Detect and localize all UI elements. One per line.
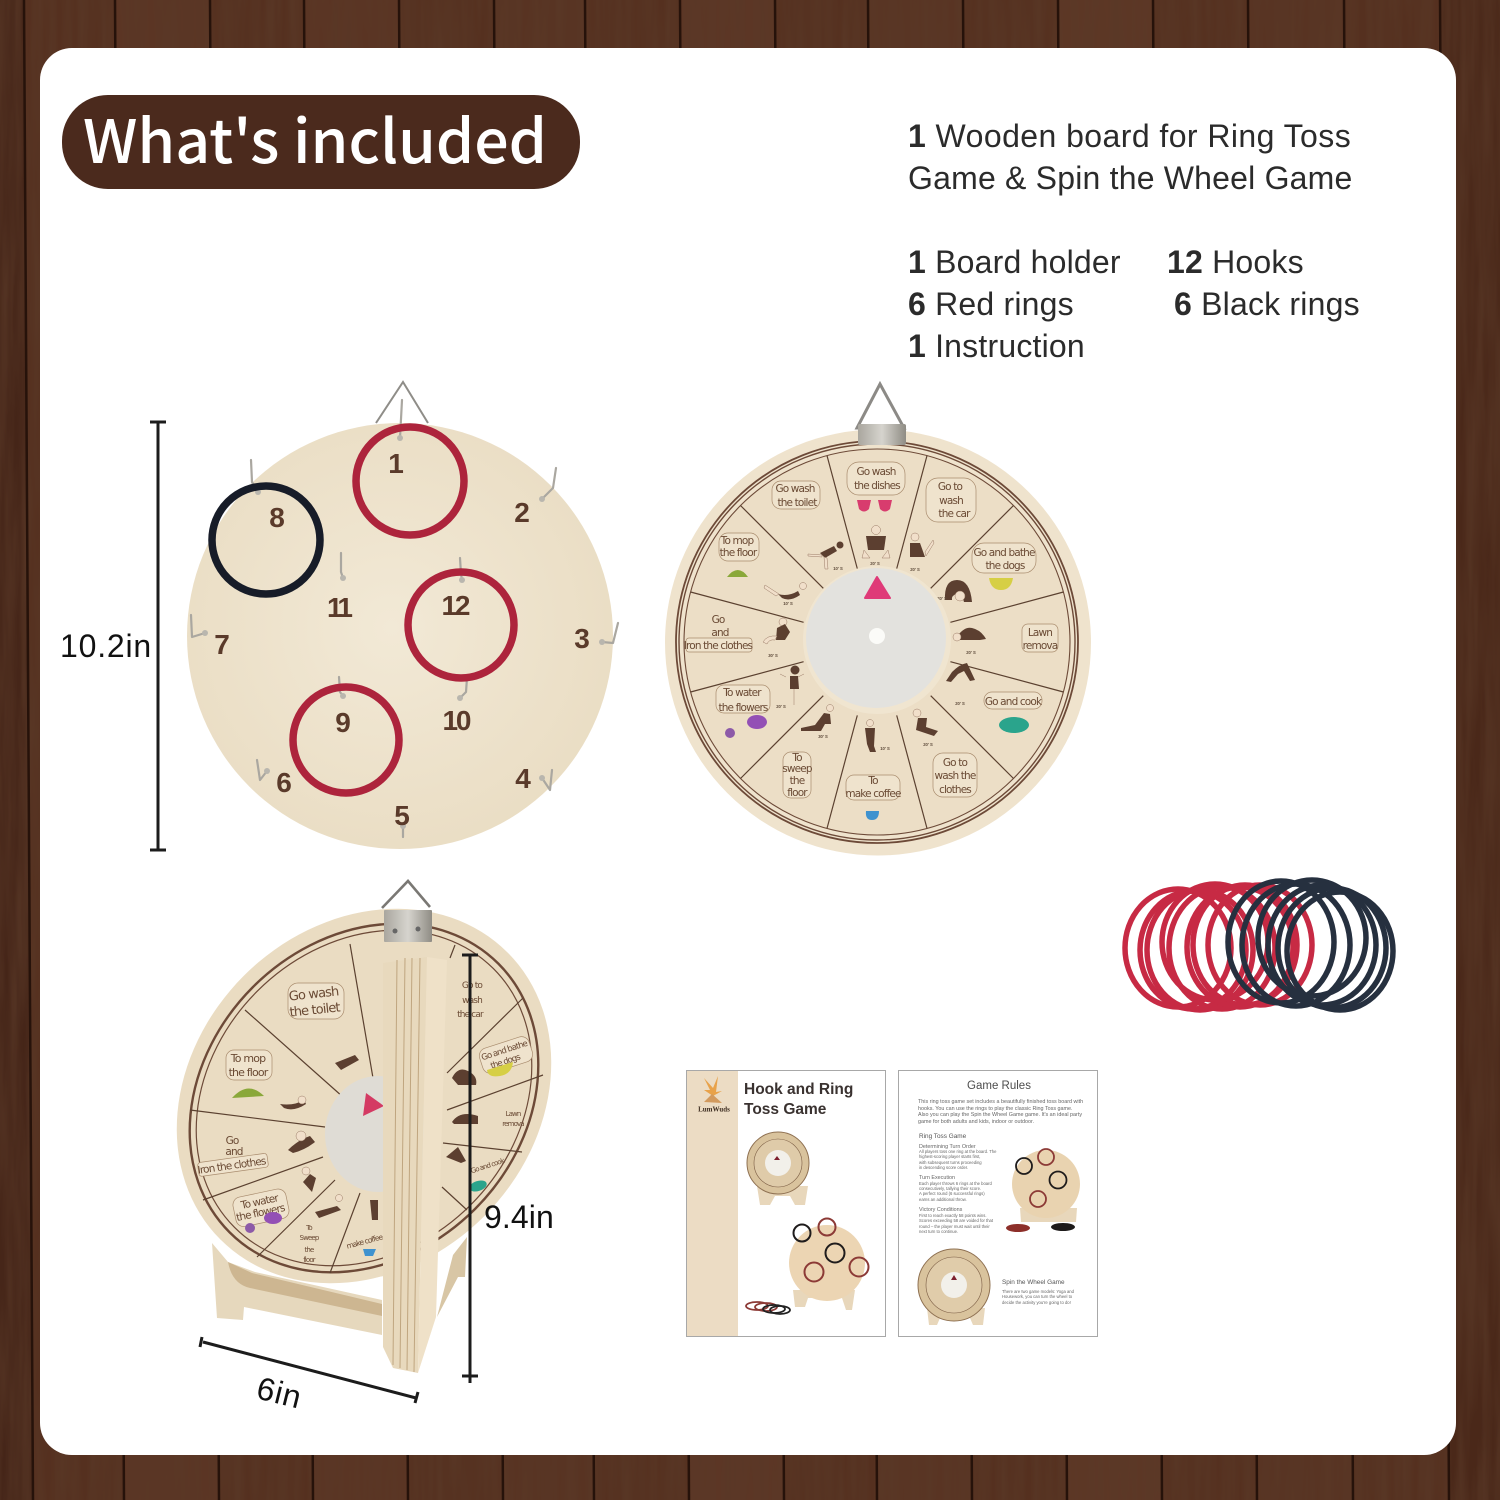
spin the wheel rules: Housework, you can turn the wheel to (1002, 1294, 1073, 1299)
activity labels: Go wash (856, 466, 896, 478)
cover heading (744, 1081, 853, 1118)
ring toss rules: Determining Turn Order (919, 1144, 976, 1150)
hook numbers: 6 (276, 767, 292, 798)
yoga timer captions: 10' S (880, 746, 890, 751)
activity labels: Iron the clothes (684, 640, 753, 652)
perspective wheel labels: Iron the clothes (197, 1155, 267, 1177)
dimension: board diameter 10.2in: 10.2in (60, 628, 152, 664)
hook numbers: 8 (269, 502, 285, 533)
yoga timer captions (768, 561, 976, 751)
pink pointer (363, 1093, 384, 1116)
ring toss rules: highest-scoring player starts first, (919, 1154, 980, 1159)
ring toss rules: earns an additional throw. (919, 1197, 967, 1202)
perspective wheel labels: Go and cook (470, 1156, 507, 1175)
perspective wheel labels: the flowers (235, 1202, 286, 1224)
activity labels: To water (722, 687, 762, 699)
perspective wheel labels: Go (226, 1135, 239, 1147)
activity labels: wash the (935, 770, 976, 782)
wheel in perspective (100, 832, 628, 1360)
hook numbers: 9 (335, 707, 351, 738)
brand name: LumWuds (698, 1106, 730, 1114)
title badge: What's included (83, 94, 547, 181)
ring toss rules: in descending score order. (919, 1165, 968, 1170)
activity labels: the dishes (854, 480, 900, 492)
mini wheel on stand (747, 1132, 809, 1205)
perspective wheel labels: make coffee (345, 1232, 385, 1251)
red rings (1125, 884, 1312, 1010)
dimension: height 9.4in (462, 955, 554, 1383)
activity labels: Go to (938, 481, 963, 493)
yoga timer captions: 10' S (833, 566, 843, 571)
photo: wheel (918, 1249, 990, 1325)
contents list: Game & Spin the Wheel Game (908, 160, 1353, 196)
perspective wheel labels: floor (303, 1256, 316, 1264)
spin the wheel rules (1002, 1279, 1075, 1305)
perspective wheel labels: Go to (462, 981, 483, 991)
activity labels: make coffee (845, 788, 901, 800)
activity labels: clothes (939, 784, 971, 796)
ring toss rules: with subsequent turns proceeding (919, 1160, 982, 1165)
perspective wheel labels: the dogs (489, 1052, 523, 1072)
yoga timer captions: 10' S (783, 601, 793, 606)
yoga timer captions: 20' S (776, 704, 786, 709)
perspective wheel labels: the toilet (289, 1000, 341, 1021)
hook numbers: 2 (514, 497, 530, 528)
activity labels: floor (787, 787, 808, 799)
segment spokes (691, 456, 1063, 828)
yoga timer captions: 20' S (910, 567, 920, 572)
activity labels: Go to (943, 757, 968, 769)
contents list: 1 Board holder (908, 244, 1121, 280)
wheel disc (665, 430, 1091, 856)
ring toss rules: First to reach exactly 58 points wins. (919, 1213, 986, 1218)
ring toss rules: round – the player must wait until their (919, 1224, 990, 1229)
perspective wheel labels: Go wash (288, 984, 340, 1005)
hook numbers (214, 448, 590, 831)
rules heading: Game Rules (967, 1080, 1031, 1092)
activity labels: the car (938, 508, 971, 520)
red ring on hook 9 (293, 687, 399, 793)
metal bracket (384, 910, 432, 942)
ring toss rules: Each player throws 6 rings at the board (919, 1181, 993, 1186)
perspective wheel labels: To (305, 1224, 312, 1232)
hanging triangle (382, 881, 430, 908)
stand upright board (383, 957, 447, 1373)
activity labels: Go wash (775, 483, 815, 495)
hooks (191, 400, 618, 837)
hook numbers: 7 (214, 629, 230, 660)
perspective wheel labels: Lawn (506, 1110, 521, 1118)
spinner hub (806, 568, 946, 708)
yoga figures (763, 526, 986, 752)
mini ring pile (746, 1302, 790, 1314)
contents list (908, 118, 1360, 364)
ring toss rules: consecutively, tallying their score. (919, 1186, 981, 1191)
spin the wheel board (665, 384, 1091, 856)
perspective wheel labels: remova (502, 1120, 524, 1128)
ring toss rules: All players toss one ring at the board. The (919, 1149, 997, 1154)
board disc (187, 423, 613, 849)
perspective wheel labels: the floor (229, 1066, 269, 1079)
perspective wheel labels: the (305, 1246, 314, 1254)
activity labels: To mop (720, 535, 754, 547)
mini ring board on stand (789, 1218, 868, 1310)
hook numbers: 12 (442, 590, 470, 621)
hook numbers: 11 (327, 592, 353, 623)
cover heading: Hook and Ring (744, 1081, 853, 1098)
activity labels: the toilet (777, 497, 817, 509)
spin the wheel rules: There are two game models: Yoga and (1002, 1289, 1075, 1294)
hook numbers: 10 (442, 705, 472, 736)
instruction sheet: game rules (898, 1070, 1098, 1336)
perspective wheel labels (197, 981, 535, 1264)
ring toss rules: Ring Toss Game (919, 1133, 967, 1140)
ring toss rules: Scores exceeding 58 are voided for that (919, 1218, 994, 1223)
perspective yoga figures (280, 1055, 478, 1220)
coloured chore icons (725, 500, 1029, 820)
intro paragraph: Also you can play the Spin the Wheel Game game. It's an ideal party (918, 1112, 1082, 1118)
perspective wheel labels: To water (239, 1192, 280, 1212)
stand base (212, 1237, 467, 1335)
yoga timer captions: 20' S (937, 596, 947, 601)
contents list: 1 Instruction (908, 328, 1085, 364)
red ring on hook 1 (356, 427, 464, 535)
black rings (1228, 880, 1393, 1010)
intro paragraph: This ring toss game set includes a beautifully finished toss board with (918, 1099, 1083, 1105)
perspective wheel labels: Sweep (300, 1234, 320, 1242)
hook numbers: 3 (574, 623, 590, 654)
felt spinner hub (325, 1076, 431, 1192)
yoga timer captions: 30' S (768, 653, 778, 658)
activity labels: Go and bathe (973, 547, 1035, 559)
rim rings (676, 441, 1078, 843)
perspective wheel labels: Go and bathe (480, 1039, 529, 1063)
activity labels: sweep (782, 763, 813, 775)
ring toss rules (919, 1133, 997, 1234)
yoga timer captions: 20' S (955, 701, 965, 706)
hook numbers: 1 (388, 448, 404, 479)
activity labels: To (791, 752, 802, 764)
activity labels: the (790, 775, 805, 787)
black ring on hook 8 (212, 486, 320, 594)
yoga timer captions: 20' S (870, 561, 880, 566)
hook numbers: 5 (394, 800, 410, 831)
standing board with dimensions (100, 832, 628, 1416)
loose rings pile (1125, 880, 1393, 1010)
cover heading: Toss Game (744, 1101, 827, 1118)
activity labels: the dogs (986, 560, 1025, 572)
activity labels: and (711, 627, 729, 639)
hanging triangle hook (376, 382, 428, 423)
activity labels: Go and cook (985, 696, 1043, 708)
ring toss rules: Victory Conditions (919, 1207, 963, 1213)
yoga timer captions: 20' S (923, 742, 933, 747)
activity labels: the floor (720, 547, 758, 559)
contents list: 6 Red rings (908, 286, 1074, 322)
activity labels: remova (1023, 640, 1058, 652)
spin the wheel rules: decide the activity you're going to do! (1002, 1300, 1071, 1305)
perspective wheel labels: the car (457, 1010, 484, 1020)
perspective wheel labels: and (225, 1146, 243, 1158)
centre peg (869, 628, 885, 644)
hanging triangle (857, 384, 904, 428)
yoga timer captions: 30' S (818, 734, 828, 739)
contents list: 6 Black rings (1174, 286, 1360, 322)
dimension: depth 6in (200, 1337, 418, 1416)
pink pointer triangle (865, 577, 890, 598)
ring toss rules: next turn to continue. (919, 1229, 958, 1234)
red ring on hook 12 (408, 572, 514, 678)
perspective wheel labels: wash (462, 996, 482, 1006)
hook numbers: 4 (515, 763, 531, 794)
sheet page (898, 1070, 1098, 1336)
contents list: 12 Hooks (1167, 244, 1304, 280)
activity labels (684, 462, 1058, 800)
intro paragraph (918, 1099, 1083, 1125)
perspective wheel labels: To mop (230, 1052, 266, 1065)
ring toss rules: Turn Execution (919, 1175, 955, 1181)
intro paragraph: hooks. You can use the rings to play the classic Ring Toss game. (918, 1106, 1073, 1112)
yoga timer captions: 20' S (966, 650, 976, 655)
wood sidebar (687, 1071, 738, 1336)
dimension: depth 6in: 6in (253, 1370, 306, 1416)
photo: ring board (1006, 1149, 1080, 1232)
spin the wheel rules: Spin the Wheel Game (1002, 1279, 1065, 1286)
contents list: 1 Wooden board for Ring Toss (908, 118, 1351, 154)
activity labels: wash (939, 495, 963, 507)
ring toss board (187, 382, 618, 849)
dimension: height 9.4in: 9.4in (484, 1199, 554, 1235)
spinner hub halo (803, 566, 951, 714)
activity labels: Lawn (1028, 627, 1052, 639)
fox logo (704, 1076, 722, 1103)
sheet page (686, 1070, 886, 1336)
dimension: board diameter 10.2in (60, 422, 166, 850)
metal bracket (858, 424, 906, 445)
activity labels: the flowers (718, 702, 768, 714)
activity labels: To (867, 775, 878, 787)
ring toss rules: A perfect round (6 successful rings) (919, 1191, 985, 1196)
intro paragraph: game for both adults and kids, indoor or outdoor. (918, 1119, 1034, 1125)
instruction sheet: cover (686, 1070, 886, 1336)
activity labels: Go (712, 614, 725, 626)
